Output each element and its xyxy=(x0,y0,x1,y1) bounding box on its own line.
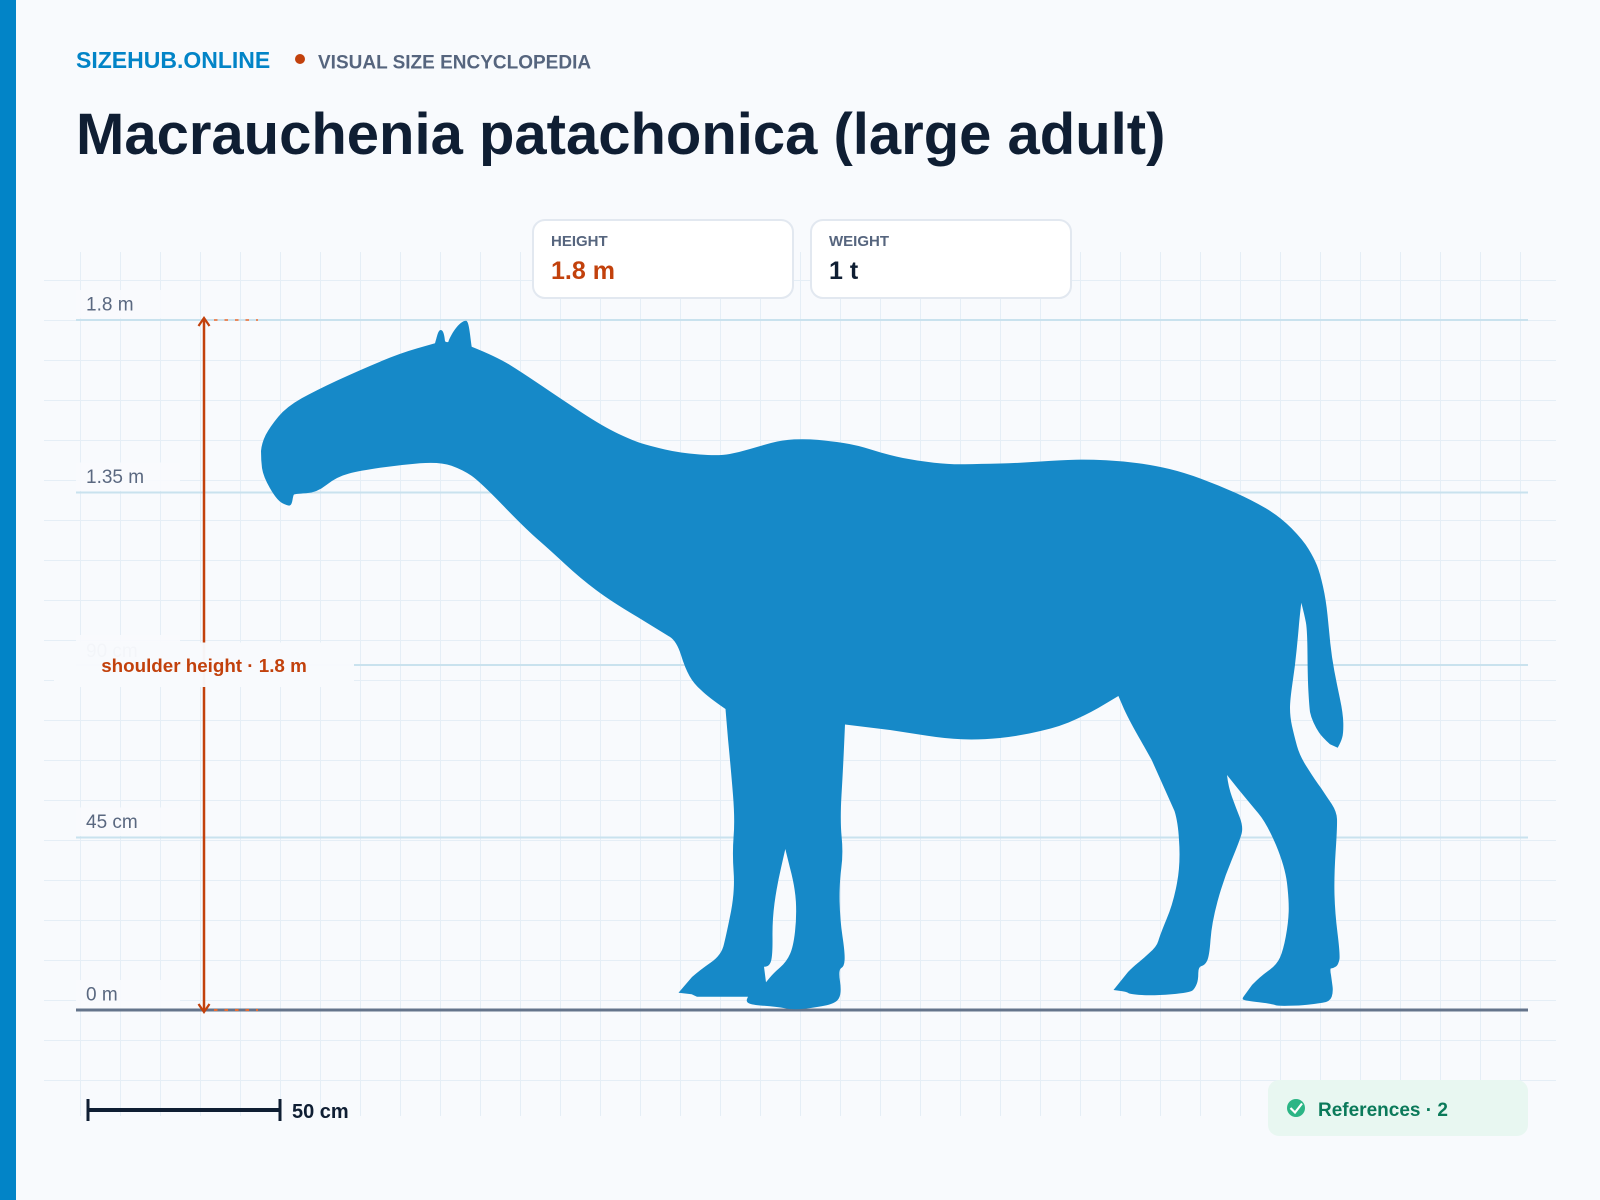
label 1.35 m: 1.35 m xyxy=(86,467,144,488)
brand name: SIZEHUB.ONLINE xyxy=(76,47,270,73)
label 1.8 m xyxy=(76,290,180,318)
title: Macrauchenia patachonica (large adult) xyxy=(76,102,1165,167)
stat card: weight xyxy=(811,220,1071,298)
silhouette: macrauchenia xyxy=(261,321,1343,1009)
label 45 cm: 45 cm xyxy=(86,812,138,833)
background grid xyxy=(44,252,1556,1116)
measurement arrow xyxy=(198,318,258,1012)
label 1.8 m: 1.8 m xyxy=(86,294,134,316)
references badge xyxy=(1268,1080,1528,1136)
left accent bar xyxy=(0,0,16,1200)
label 90 cm: 90 cm xyxy=(86,641,138,662)
weight label: WEIGHT xyxy=(829,233,889,250)
measurement label: shoulder height · 1.8 m xyxy=(101,655,307,676)
scale labels xyxy=(76,290,180,1008)
separator dot xyxy=(295,54,305,64)
label 0 m xyxy=(76,980,180,1008)
brand header xyxy=(76,47,591,74)
label 1.35 m xyxy=(76,462,180,491)
label 90 cm xyxy=(76,635,180,664)
tagline: VISUAL SIZE ENCYCLOPEDIA xyxy=(318,52,591,74)
measurement label xyxy=(54,642,354,687)
label 0 m: 0 m xyxy=(86,984,118,1006)
weight value: 1 t xyxy=(829,257,859,285)
references text: References · 2 xyxy=(1318,1100,1448,1121)
label 45 cm xyxy=(76,808,180,836)
icon: check circle xyxy=(1287,1099,1305,1117)
height label: HEIGHT xyxy=(551,233,608,250)
ground line xyxy=(76,1008,1528,1012)
scale bar label: 50 cm xyxy=(292,1101,349,1123)
stat card: height xyxy=(533,220,793,298)
height guide lines xyxy=(76,320,1528,838)
height value: 1.8 m xyxy=(551,257,615,285)
